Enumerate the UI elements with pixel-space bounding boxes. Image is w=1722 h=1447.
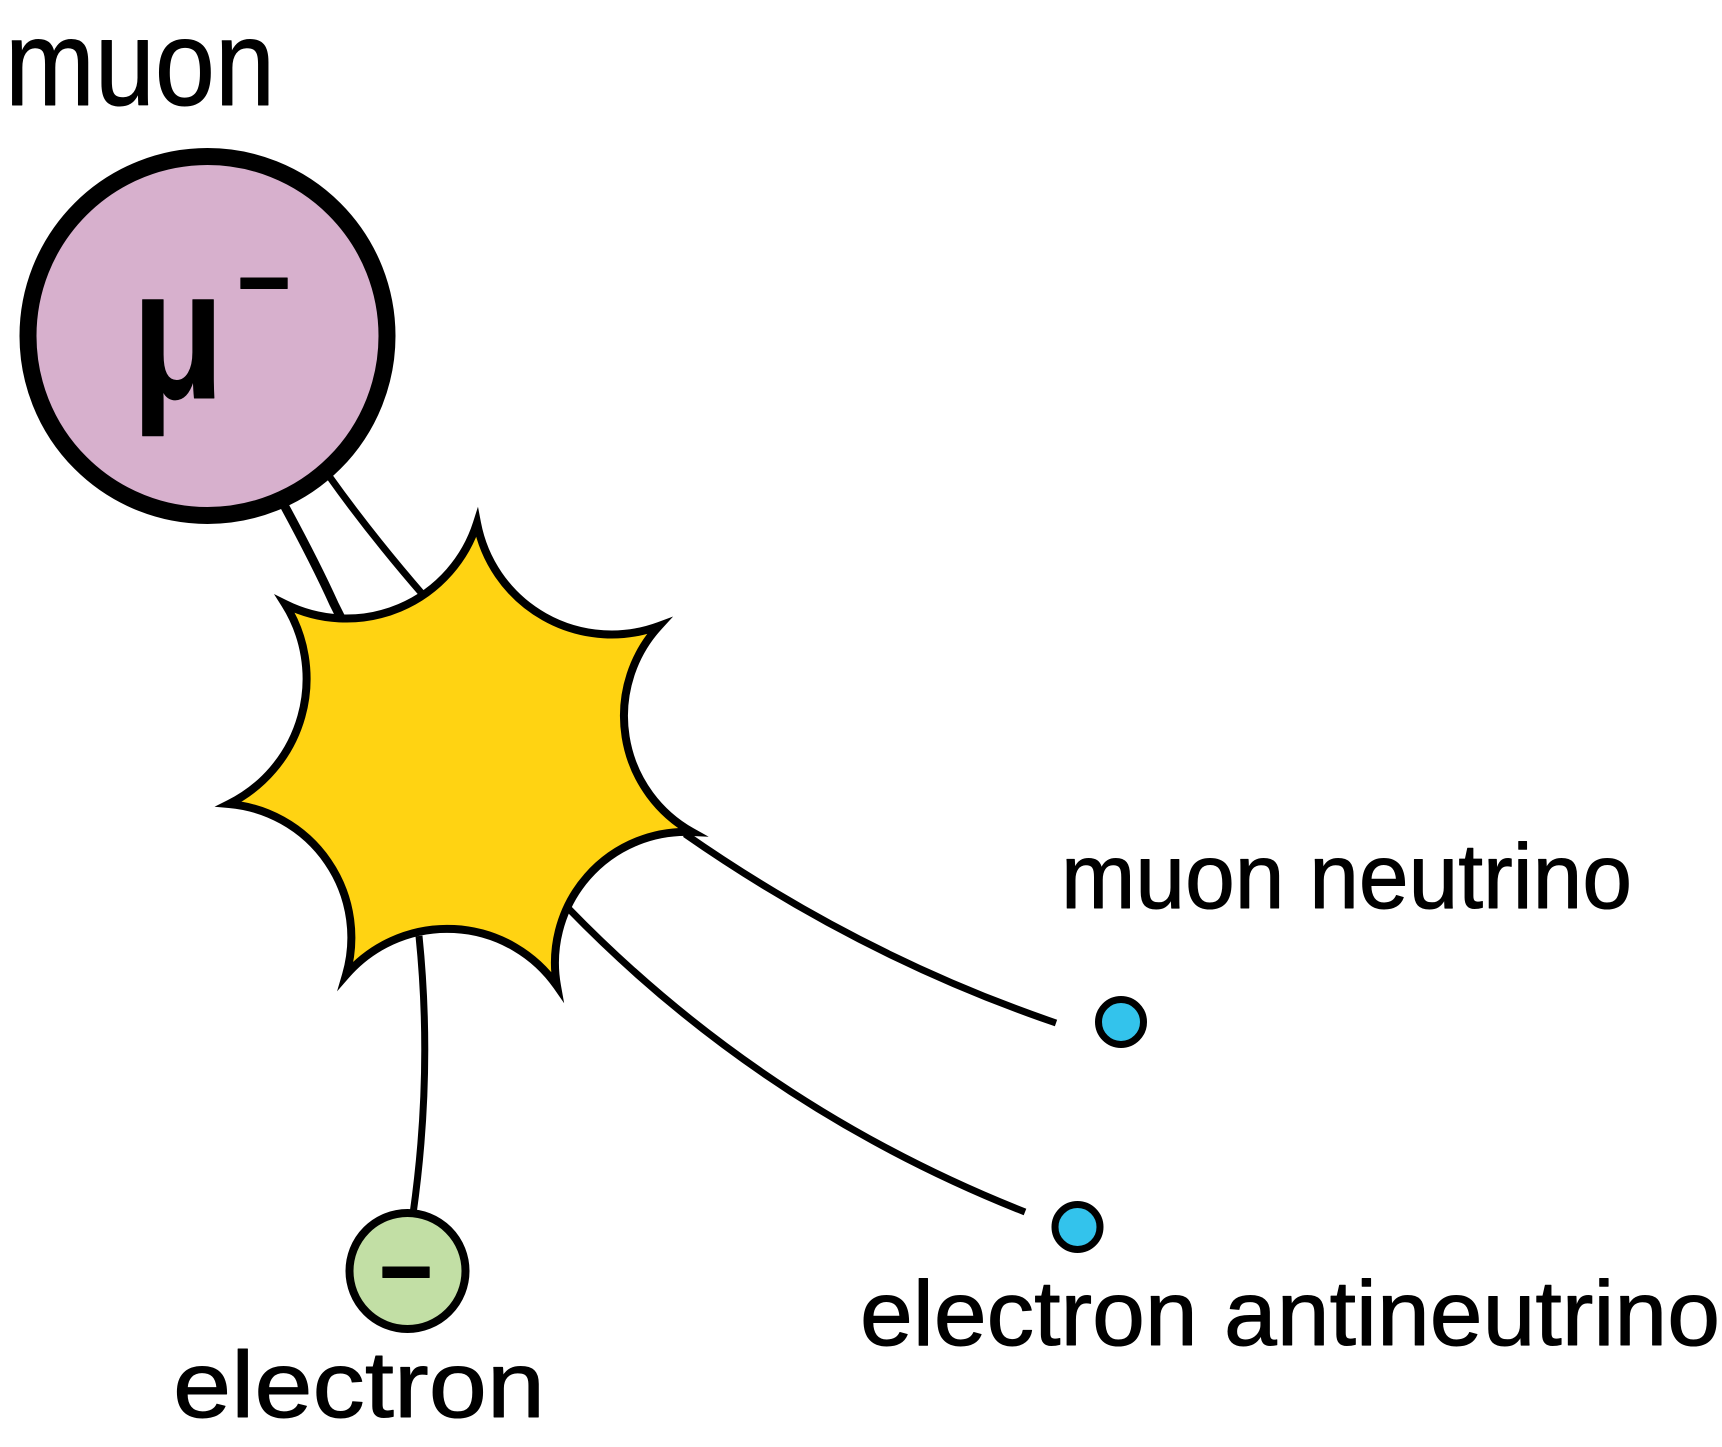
line from burst to electron antineutrino (568, 908, 1025, 1212)
yellow burst (229, 523, 692, 986)
muon decay lines: left line from muon to burst (284, 505, 344, 624)
muon symbol: μ (132, 231, 224, 438)
muon circle (28, 156, 387, 516)
label: electron: electron (173, 1332, 545, 1437)
electron antineutrino dot (1055, 1204, 1100, 1250)
line from burst to muon neutrino (685, 834, 1056, 1023)
muon decay lines: right line from muon to burst (329, 476, 424, 596)
muon particle (28, 156, 387, 516)
electron negative sign: − (379, 1218, 433, 1325)
electron particle (350, 1213, 466, 1329)
electron circle (350, 1213, 466, 1329)
muon neutrino dot (1098, 1000, 1144, 1044)
label: muon neutrino: muon neutrino (1061, 826, 1632, 928)
line from burst to electron (413, 936, 425, 1214)
negative charge sign: − (237, 229, 291, 336)
label: electron antineutrino: electron antineutrino (860, 1263, 1720, 1365)
